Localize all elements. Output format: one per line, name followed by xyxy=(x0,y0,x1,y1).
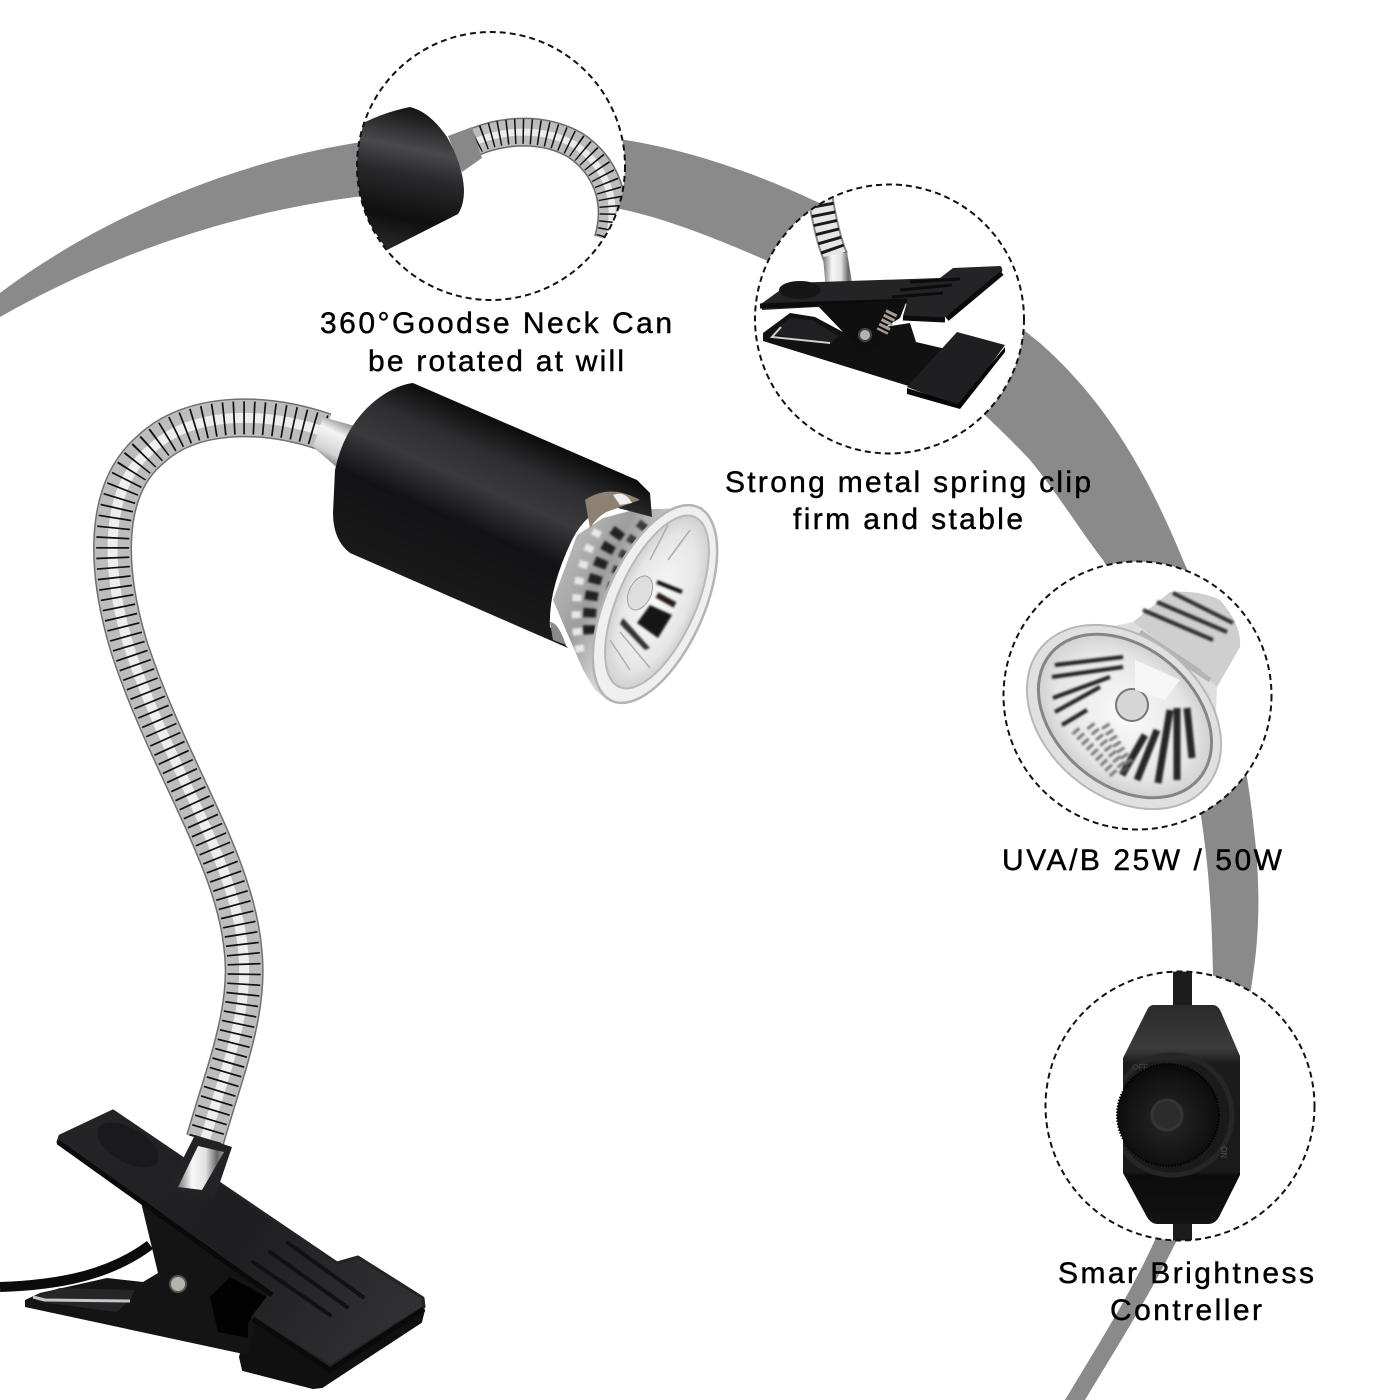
rim and reflector xyxy=(1026,624,1222,810)
lower jaw xyxy=(763,313,950,388)
caption: spring clip: firm and stable xyxy=(793,503,1023,536)
pivot body and jaw xyxy=(25,1198,275,1355)
caption: gooseneck xyxy=(320,307,672,378)
lamp holder and bulb xyxy=(333,383,718,704)
caption: gooseneck: be rotated at will xyxy=(368,345,624,378)
glass rim xyxy=(567,487,743,721)
caption: spring clip: Strong metal spring clip xyxy=(725,466,1091,499)
lever edges xyxy=(58,1142,424,1370)
cone and ribs xyxy=(553,507,703,700)
top lever xyxy=(58,1111,424,1366)
detail circle: dimmer controller xyxy=(1046,960,1314,1250)
lower plate xyxy=(240,1310,424,1388)
caption: brightness controller: Smar Brightness xyxy=(1058,1257,1314,1290)
black cylinder xyxy=(333,383,652,648)
central wedge xyxy=(818,304,906,332)
detail circle: dimmer controller: ON xyxy=(1219,1146,1228,1158)
bottom chrome ferrule xyxy=(167,1135,232,1200)
top chrome ferrule xyxy=(313,417,358,470)
tab xyxy=(907,332,1005,407)
screw base xyxy=(1133,592,1240,687)
socket interior xyxy=(585,492,640,528)
caption: gooseneck: 360°Goodse Neck Can xyxy=(320,307,672,340)
filament xyxy=(622,572,658,614)
detail circle: UVA/B bulb xyxy=(990,562,1272,847)
caption: spring clip xyxy=(725,466,1091,536)
main spring clip xyxy=(25,1111,424,1388)
caption: brightness controller xyxy=(1058,1257,1314,1327)
detail circle: dimmer controller: OFF xyxy=(1132,1063,1148,1072)
reflector streaks xyxy=(620,582,682,650)
jaw window xyxy=(210,1277,267,1338)
detail circle: spring clip xyxy=(755,184,1024,454)
detail circle: gooseneck xyxy=(340,32,625,300)
dimple xyxy=(90,1113,166,1177)
top lever xyxy=(761,266,1002,318)
rivet xyxy=(170,1276,186,1292)
jaw recess xyxy=(32,1288,135,1312)
caption: bulb wattage: UVA/B 25W / 50W xyxy=(1002,844,1283,877)
gooseneck arm xyxy=(113,418,325,1140)
ribs xyxy=(253,1243,363,1315)
power cable xyxy=(0,1245,150,1287)
silver spring xyxy=(33,1297,130,1301)
caption: brightness controller: Contreller xyxy=(1110,1294,1262,1327)
